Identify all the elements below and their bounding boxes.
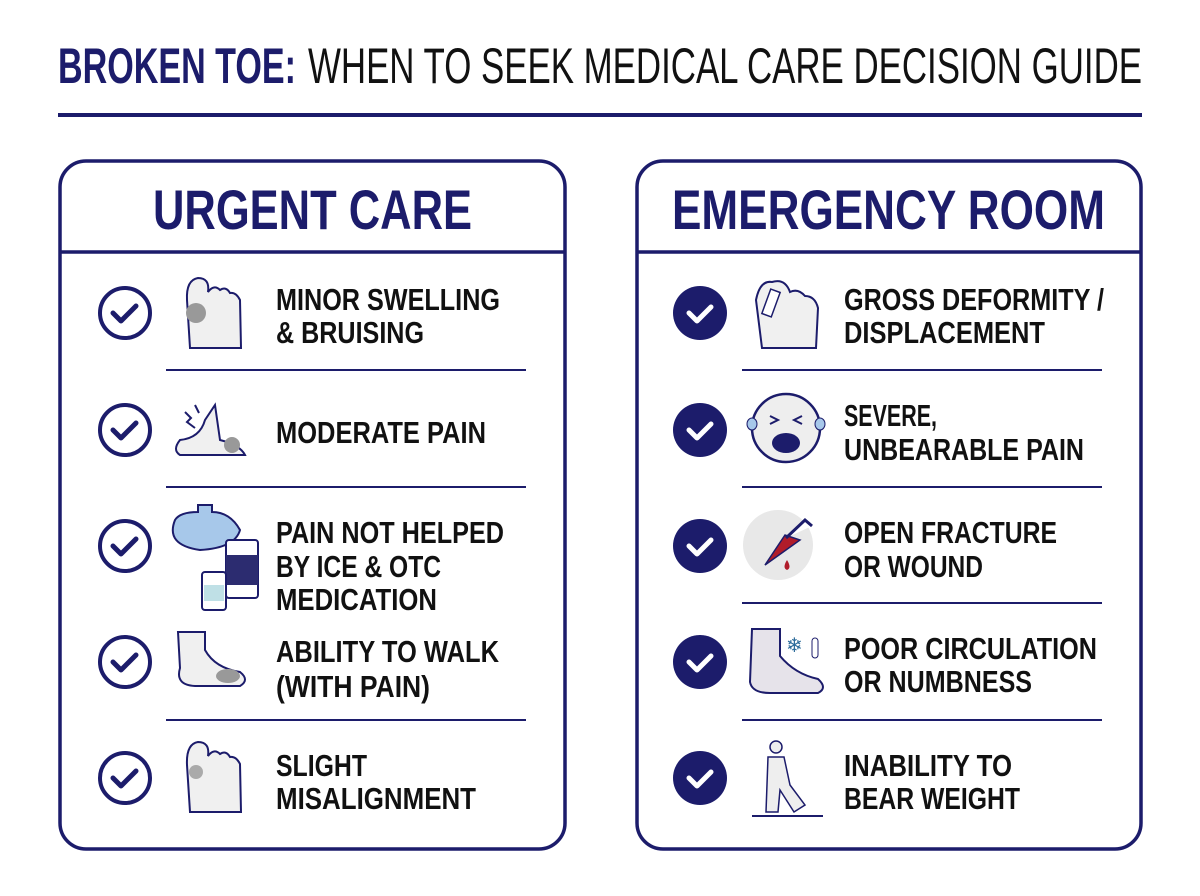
item: minor swelling: MINOR SWELLING [276,282,500,317]
item: slight misalignment: MISALIGNMENT [276,781,476,816]
item: pain not helped: PAIN NOT HELPED [276,515,504,550]
item: moderate pain: MODERATE PAIN [276,415,486,450]
item: pain not helped: MEDICATION [276,582,437,617]
item: minor swelling [100,278,500,350]
item: pain not helped [100,505,504,617]
item: inability to bear weight [673,741,1020,816]
item: severe pain: UNBEARABLE PAIN [844,432,1084,467]
item: severe pain: SEVERE, [844,398,937,433]
panel: urgent care [60,161,565,849]
item: gross deformity: DISPLACEMENT [844,315,1045,350]
heading: urgent care: URGENT CARE [153,178,472,241]
title: BROKEN TOE: [58,38,296,94]
item: inability to bear weight: BEAR WEIGHT [844,781,1020,816]
item: poor circulation: POOR CIRCULATION [844,631,1097,666]
item: slight misalignment: SLIGHT [276,748,367,783]
item: severe pain [673,394,1084,467]
item: poor circulation: ❄ [786,635,803,657]
item: minor swelling: & BRUISING [276,315,424,350]
item: moderate pain [100,405,486,455]
item: pain not helped: BY ICE & OTC [276,549,441,584]
item: open fracture: OPEN FRACTURE [844,515,1057,550]
item: ability to walk [100,632,499,704]
panel: emergency room [637,161,1141,849]
item: slight misalignment [100,742,476,816]
item: ability to walk: ABILITY TO WALK [276,634,499,669]
item: poor circulation [673,629,1097,699]
item: gross deformity [673,281,1104,350]
item: open fracture: OR WOUND [844,549,983,584]
item: gross deformity: GROSS DEFORMITY / [844,282,1104,317]
item: ability to walk: (WITH PAIN) [276,669,430,704]
item: poor circulation: OR NUMBNESS [844,664,1032,699]
item: inability to bear weight: INABILITY TO [844,748,1012,783]
item: open fracture [673,510,1057,584]
